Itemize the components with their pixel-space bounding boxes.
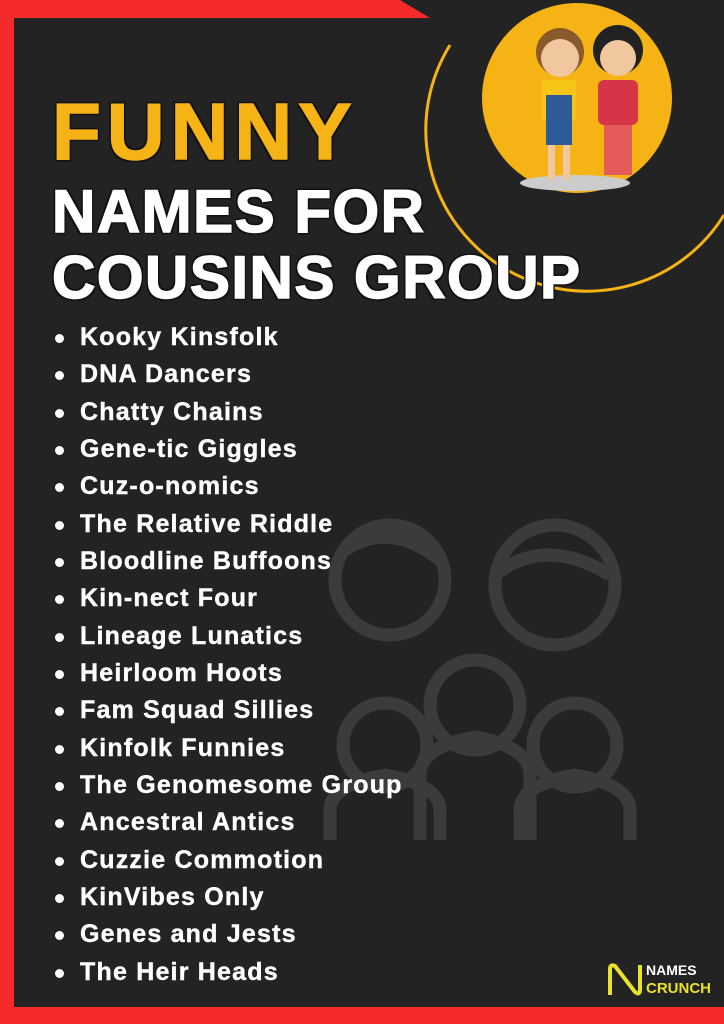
title: COUSINS GROUP — [52, 244, 582, 311]
text: Ancestral Antics — [80, 808, 296, 836]
text: Kin-nect Four — [80, 584, 258, 612]
logo: names crunch: NAMES — [646, 962, 697, 978]
text: The Heir Heads — [80, 958, 279, 986]
text: Bloodline Buffoons — [80, 547, 332, 575]
text: DNA Dancers — [80, 360, 252, 388]
text: Kooky Kinsfolk — [80, 323, 279, 351]
text: Cuz-o-nomics — [80, 472, 260, 500]
title — [52, 87, 582, 311]
text: Lineage Lunatics — [80, 622, 303, 650]
text: Genes and Jests — [80, 920, 297, 948]
text: KinVibes Only — [80, 883, 265, 911]
text: Fam Squad Sillies — [80, 696, 314, 724]
logo: names crunch — [608, 962, 711, 997]
title: FUNNY — [52, 87, 358, 176]
text: Chatty Chains — [80, 398, 264, 426]
text: Heirloom Hoots — [80, 659, 283, 687]
title: NAMES FOR — [52, 178, 426, 245]
names list — [55, 323, 403, 986]
text: The Genomesome Group — [80, 771, 403, 799]
text: Gene-tic Giggles — [80, 435, 298, 463]
logo: names crunch: CRUNCH — [646, 980, 711, 997]
text: The Relative Riddle — [80, 510, 333, 538]
text: Cuzzie Commotion — [80, 846, 324, 874]
hero illustration: yellow circle with kids — [424, 3, 724, 293]
background family icon — [324, 518, 636, 840]
text: Kinfolk Funnies — [80, 734, 286, 762]
